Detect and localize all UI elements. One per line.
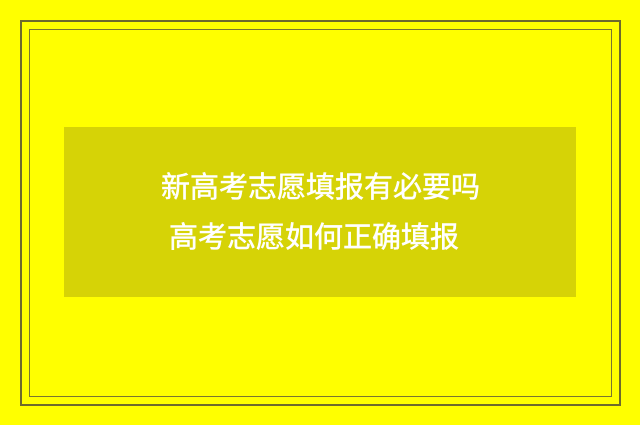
title line 2: 高考志愿如何正确填报: [169, 222, 459, 254]
title line 1: 新高考志愿填报有必要吗: [161, 172, 480, 204]
title panel: [64, 127, 576, 297]
inner frame: [29, 29, 612, 397]
